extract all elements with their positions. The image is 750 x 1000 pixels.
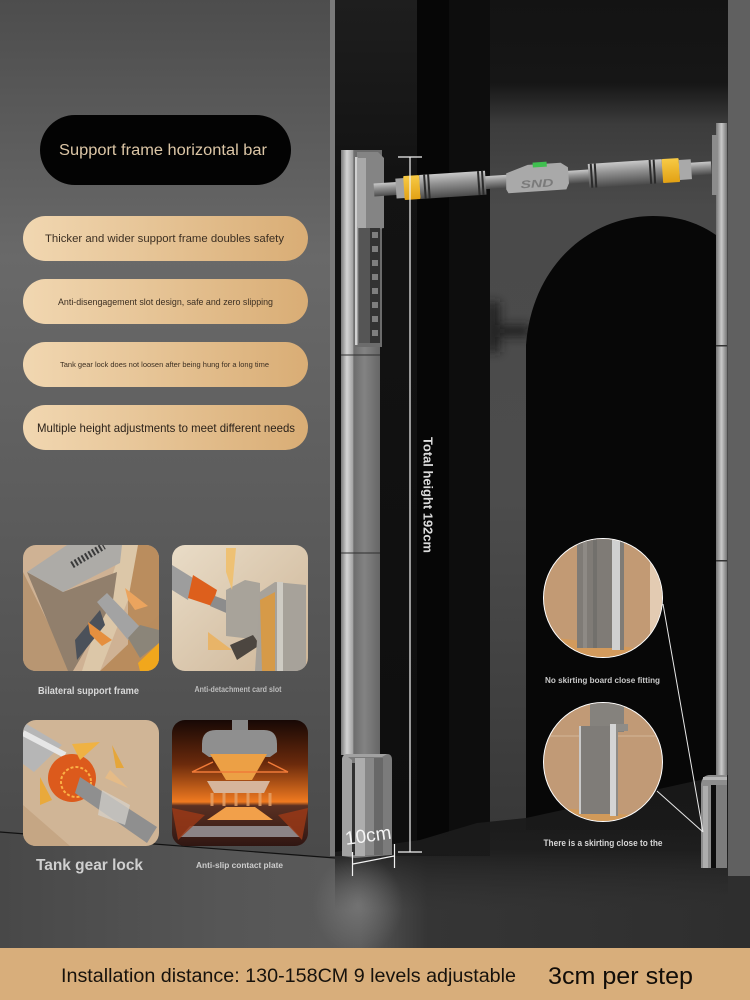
bar level housing with logo bbox=[505, 160, 569, 193]
left door frame post bbox=[341, 150, 384, 755]
bottom banner bbox=[0, 948, 750, 1000]
caption: no skirting board: No skirting board close fitting bbox=[545, 675, 660, 685]
photo: anti-slip contact plate bbox=[172, 720, 308, 846]
detail circle: with skirting board bbox=[543, 702, 663, 825]
photo: bilateral support frame bbox=[23, 545, 159, 671]
feature pill 4: Multiple height adjustments to meet different needs bbox=[37, 421, 295, 435]
right floor foot bbox=[701, 775, 727, 868]
feature pill 3: Tank gear lock does not loosen after being hung for a long time bbox=[60, 360, 269, 369]
photo: tank gear lock bbox=[23, 720, 159, 846]
feature pill 3 bbox=[23, 342, 308, 387]
title pill: Support frame horizontal bar bbox=[59, 142, 267, 159]
feature pill 4 bbox=[23, 405, 308, 450]
dimension: width 10cm: 10cm bbox=[344, 823, 393, 850]
callout lines bbox=[657, 604, 703, 832]
caption: anti-slip contact plate: Anti-slip contact plate bbox=[196, 860, 283, 870]
feature pill 1: Thicker and wider support frame doubles safety bbox=[45, 233, 285, 245]
bar level housing with logo: SND bbox=[520, 177, 554, 191]
title pill bbox=[40, 115, 291, 185]
step size text: 3cm per step bbox=[548, 963, 693, 990]
photo: anti-detachment card slot bbox=[172, 545, 308, 671]
feature pill 1 bbox=[23, 216, 308, 261]
horizontal pull-up bar bbox=[373, 151, 712, 202]
dimension: width 10cm bbox=[344, 823, 394, 876]
detail circle: no skirting board bbox=[543, 538, 664, 660]
caption: bilateral support frame: Bilateral support frame bbox=[38, 686, 139, 697]
feature pill 2 bbox=[23, 279, 308, 324]
right door frame post bbox=[712, 123, 727, 778]
dimension: total height: Total height 192cm bbox=[420, 437, 434, 553]
feature pill 2: Anti-disengagement slot design, safe and zero slipping bbox=[58, 296, 273, 307]
left floor foot bbox=[342, 754, 392, 858]
dimension: total height bbox=[398, 157, 434, 852]
caption: with skirting board: There is a skirting close to the bbox=[544, 838, 663, 848]
installation distance text: Installation distance: 130-158CM 9 levels adjustable bbox=[61, 966, 516, 987]
caption: tank gear lock: Tank gear lock bbox=[36, 857, 143, 874]
caption: anti-detachment card slot: Anti-detachment card slot bbox=[194, 685, 282, 694]
